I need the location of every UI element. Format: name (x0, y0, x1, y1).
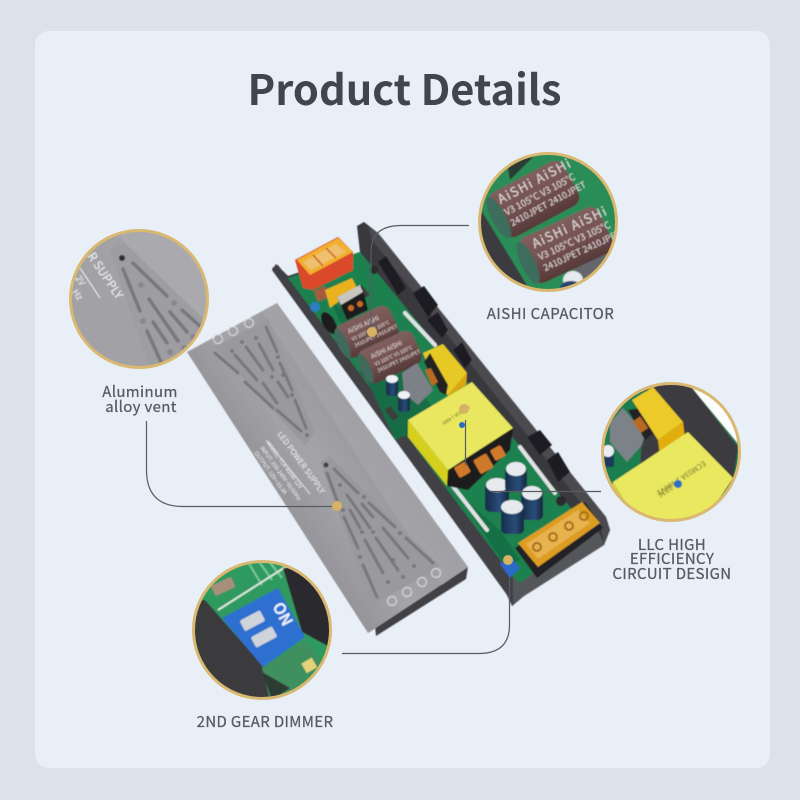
callout label: llc high efficiency circuit design: LLC HIGH (638, 534, 706, 555)
AISHI capacitors on board: AiSHi AiSHi (369, 337, 404, 361)
leader line: aishi capacitor (371, 226, 469, 331)
callout circle: llc circuit close-up: 2236 (655, 482, 675, 500)
wall slots (378, 256, 570, 482)
AISHI capacitors on board (330, 303, 425, 387)
callout circle: aluminum vent close-up: R SUPPLY (84, 249, 128, 303)
output terminal block (515, 502, 603, 578)
callout circle: dimmer close-up (192, 560, 335, 702)
callout label: llc high efficiency circuit design: EFFICIENCY (630, 548, 714, 569)
callout label: aluminum alloy vent: alloy vent (105, 396, 177, 417)
AISHI capacitors on board: 2410JPET 2410JPET (376, 348, 422, 374)
large yellow transformer: ECM03A 1 400V (440, 404, 470, 426)
callout circle: aishi capacitor close-up: 2410JPET 2410JPET (541, 226, 623, 274)
callout circle: aluminum vent close-up: Hz (70, 286, 86, 303)
AISHI capacitors on board: 2410JPET 2410JPET (353, 323, 399, 349)
blue dimmer switch (500, 556, 520, 578)
title: Product Details (248, 57, 561, 117)
copper coils (454, 445, 506, 478)
leader line: dimmer (342, 575, 510, 654)
large yellow transformer (408, 382, 513, 490)
callout circle: llc circuit close-up (600, 382, 745, 530)
large electrolytic capacitors (485, 462, 543, 534)
leader line: llc circuit (466, 420, 601, 492)
callout circle: aishi capacitor close-up: V3 105°C V3 105°C (502, 169, 578, 218)
product: open power supply case (272, 222, 610, 606)
plate printed text: INPUT: 200-240V~50/60Hz (258, 444, 303, 502)
AISHI capacitors on board: AiSHi AiSHi (346, 312, 381, 336)
raised vent shapes (215, 318, 315, 446)
terminal marks (214, 318, 440, 606)
AISHI capacitors on board: V3 105°C V3 105°C (373, 344, 414, 368)
callout circle: aishi capacitor close-up: AiSHi AiSHi (494, 153, 575, 208)
callout label: 2nd gear dimmer: 2ND GEAR DIMMER (197, 711, 333, 732)
plate lip (368, 567, 468, 636)
callout label: llc high efficiency circuit design (613, 534, 731, 584)
plate printed text: OUTPUT: 12V⎓33.3A (252, 449, 289, 496)
callout circle: aishi capacitor close-up: AiSHi AiSHi (528, 200, 610, 252)
callout circle: dimmer close-up: ON (268, 597, 300, 630)
callout label: aishi capacitor: AISHI CAPACITOR (487, 303, 614, 324)
small electrolytic capacitors (386, 375, 410, 412)
plate printed text: MODEL: TCX-400W-12V (264, 439, 305, 491)
marker dots (332, 327, 513, 565)
callout circle: llc circuit close-up: ECM03A 1 400V1 (655, 458, 708, 498)
AISHI capacitors on board: V3 105°C V3 105°C (350, 319, 391, 343)
small parts near terminal (310, 278, 368, 336)
callout circle: aluminum vent close-up: 2V (73, 272, 89, 289)
plate printed text (252, 429, 328, 502)
product: aluminum vent cover plate (187, 303, 468, 636)
board tiny parts (359, 266, 566, 506)
callout circle: aluminum vent close-up (70, 230, 210, 370)
input terminal block (295, 237, 353, 290)
leader line: aluminum alloy vent (146, 421, 337, 506)
case bottom edge (513, 530, 604, 604)
callout circle: aishi capacitor close-up: V3 105°C V3 105°C (535, 217, 613, 263)
gray component box (402, 363, 433, 405)
case right wall (272, 222, 610, 606)
callout label: llc high efficiency circuit design: CIRCUIT DESIGN (613, 563, 731, 584)
callout label: aluminum alloy vent: Aluminum (102, 381, 178, 402)
plate printed text: LED POWER SUPPLY (275, 429, 328, 497)
callout label: aluminum alloy vent (102, 381, 178, 417)
small yellow capacitor box (423, 344, 467, 397)
vent holes (230, 336, 416, 584)
callout circle: aishi capacitor close-up (478, 150, 626, 295)
lower vent slots (327, 469, 433, 597)
circuit board (288, 252, 593, 583)
heat bars (405, 313, 555, 530)
case left wall (272, 265, 514, 606)
callout circle: aishi capacitor close-up: 2410JPET 2410JPET (508, 178, 589, 229)
upper vent slots (215, 327, 306, 431)
plate surface (187, 303, 468, 633)
